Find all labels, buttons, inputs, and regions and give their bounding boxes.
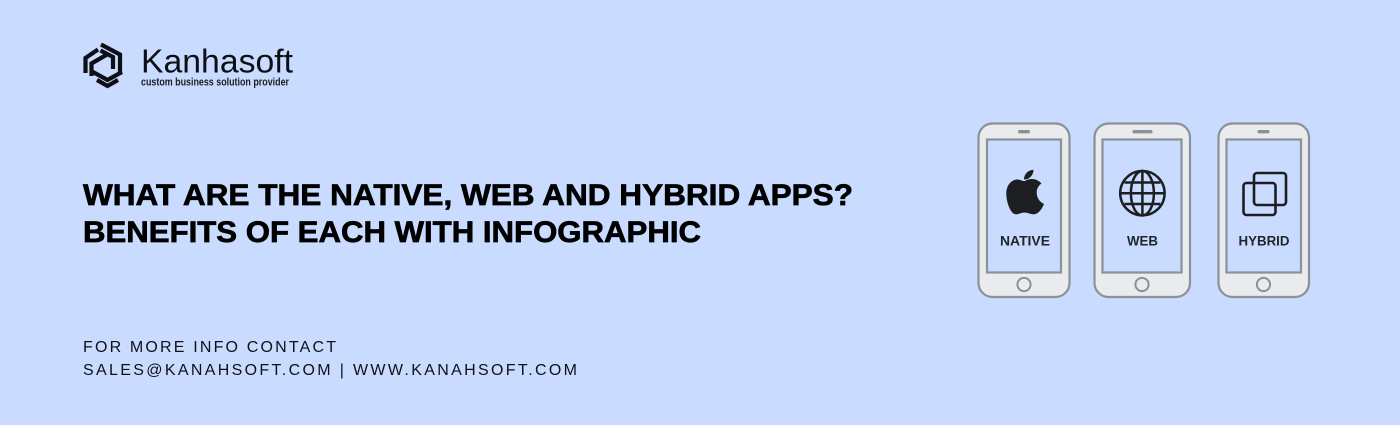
logo xyxy=(86,44,294,88)
contact text: SALES@KANAHSOFT.COM | WWW.KANAHSOFT.COM xyxy=(83,362,577,379)
phone: hybrid xyxy=(1218,124,1309,297)
title: WHAT ARE THE NATIVE, WEB AND HYBRID APPS? xyxy=(83,179,853,212)
title: BENEFITS OF EACH WITH INFOGRAPHIC xyxy=(83,216,701,249)
phone: web xyxy=(1094,124,1190,297)
phone: native xyxy=(978,124,1070,297)
icon: Kanhasoft hexagon mark xyxy=(86,44,122,86)
label: HYBRID xyxy=(1238,234,1290,249)
tagline: custom business solution provider xyxy=(141,76,290,88)
icon: apple xyxy=(1006,170,1044,214)
icon: overlapping squares xyxy=(1244,173,1286,215)
icon: globe xyxy=(1120,171,1165,215)
wordmark: Kanhasoft xyxy=(141,44,294,80)
contact text xyxy=(83,339,577,379)
label: WEB xyxy=(1127,234,1158,249)
title xyxy=(83,179,853,249)
label: NATIVE xyxy=(1000,234,1050,249)
contact text: FOR MORE INFO CONTACT xyxy=(83,339,336,356)
